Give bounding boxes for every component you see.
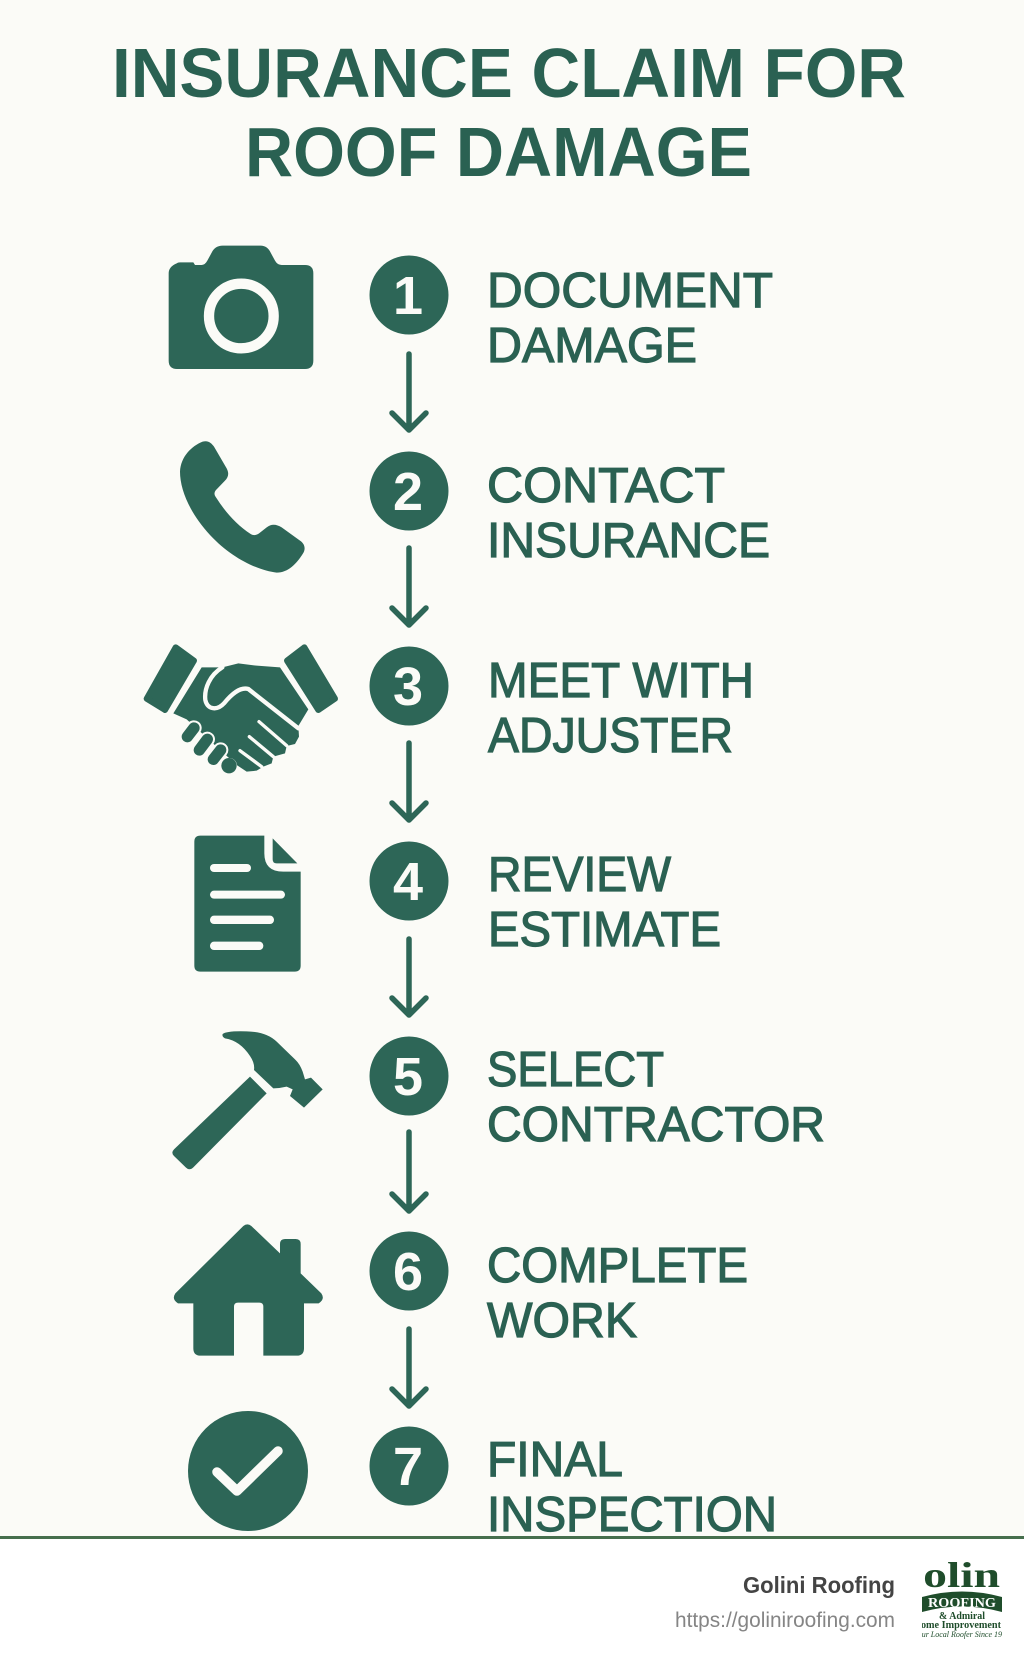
label: review estimate: REVIEW	[488, 847, 671, 902]
footer	[0, 1536, 1024, 1666]
arrow 5 to 6	[392, 1132, 426, 1211]
arrow 3 to 4	[392, 743, 426, 820]
label: document damage: DOCUMENT	[487, 263, 773, 318]
number badge 4	[370, 842, 448, 920]
number badge 1	[370, 256, 448, 334]
label: meet with adjuster: ADJUSTER	[488, 708, 733, 763]
label: contact insurance	[487, 458, 770, 568]
arrow 1 to 2	[392, 354, 426, 430]
label: meet with adjuster: MEET WITH	[488, 653, 754, 708]
logo: & Admiral	[939, 1611, 985, 1622]
logo: Golin	[886, 1555, 1000, 1595]
icon: handshake	[147, 647, 335, 773]
arrow 4 to 5	[392, 939, 426, 1015]
number badge 6: 6	[393, 1242, 423, 1302]
label: select contractor: CONTRACTOR	[487, 1097, 825, 1152]
number badge 3: 3	[393, 657, 423, 717]
number badge 3	[370, 646, 448, 726]
number badge 4: 4	[393, 852, 423, 912]
title	[112, 34, 906, 191]
label: complete work: COMPLETE	[487, 1238, 748, 1293]
step 4: review estimate	[194, 836, 721, 1015]
logo: Your Local Roofer Since 1975	[914, 1630, 1010, 1639]
logo: ROOFING	[928, 1596, 996, 1611]
number badge 7: 7	[393, 1437, 423, 1497]
icon: document	[194, 836, 301, 972]
number badge 2	[370, 452, 448, 530]
label: complete work: WORK	[487, 1293, 637, 1348]
number badge 5: 5	[393, 1047, 423, 1107]
step 3: meet with adjuster	[147, 646, 754, 820]
footer company name: Golini Roofing	[743, 1572, 895, 1598]
label: document damage: DAMAGE	[487, 318, 697, 373]
step 1: document damage	[169, 246, 773, 430]
label: complete work	[487, 1238, 748, 1348]
number badge 2: 2	[393, 462, 423, 522]
title: INSURANCE CLAIM FOR	[112, 34, 906, 112]
step 2: contact insurance	[180, 441, 770, 625]
step 5: select contractor	[172, 1031, 825, 1211]
icon: house	[174, 1224, 323, 1356]
label: final inspection: INSPECTION	[487, 1487, 777, 1542]
number badge 1: 1	[393, 266, 423, 326]
label: final inspection: FINAL	[487, 1432, 623, 1487]
icon: phone	[180, 441, 305, 573]
label: contact insurance: CONTACT	[487, 458, 725, 513]
label: final inspection	[487, 1432, 777, 1542]
number badge 5	[370, 1036, 448, 1116]
logo	[886, 1555, 1010, 1639]
label: meet with adjuster	[488, 653, 754, 763]
icon: hammer	[172, 1031, 323, 1169]
logo: Home Improvement	[913, 1620, 1002, 1631]
step 7: final inspection	[188, 1411, 777, 1542]
label: select contractor	[487, 1042, 825, 1152]
footer url: https://goliniroofing.com	[675, 1609, 895, 1632]
label: select contractor: SELECT	[487, 1042, 664, 1097]
label: review estimate	[488, 847, 721, 957]
title: ROOF DAMAGE	[245, 113, 752, 191]
label: contact insurance: INSURANCE	[487, 513, 770, 568]
arrow 2 to 3	[392, 548, 426, 625]
icon: camera	[169, 246, 313, 369]
label: document damage	[487, 263, 773, 373]
label: review estimate: ESTIMATE	[488, 902, 721, 957]
number badge 7	[370, 1426, 448, 1506]
step 6: complete work	[174, 1224, 748, 1406]
icon: check circle	[188, 1411, 308, 1531]
number badge 6	[370, 1232, 448, 1310]
arrow 6 to 7	[392, 1329, 426, 1406]
